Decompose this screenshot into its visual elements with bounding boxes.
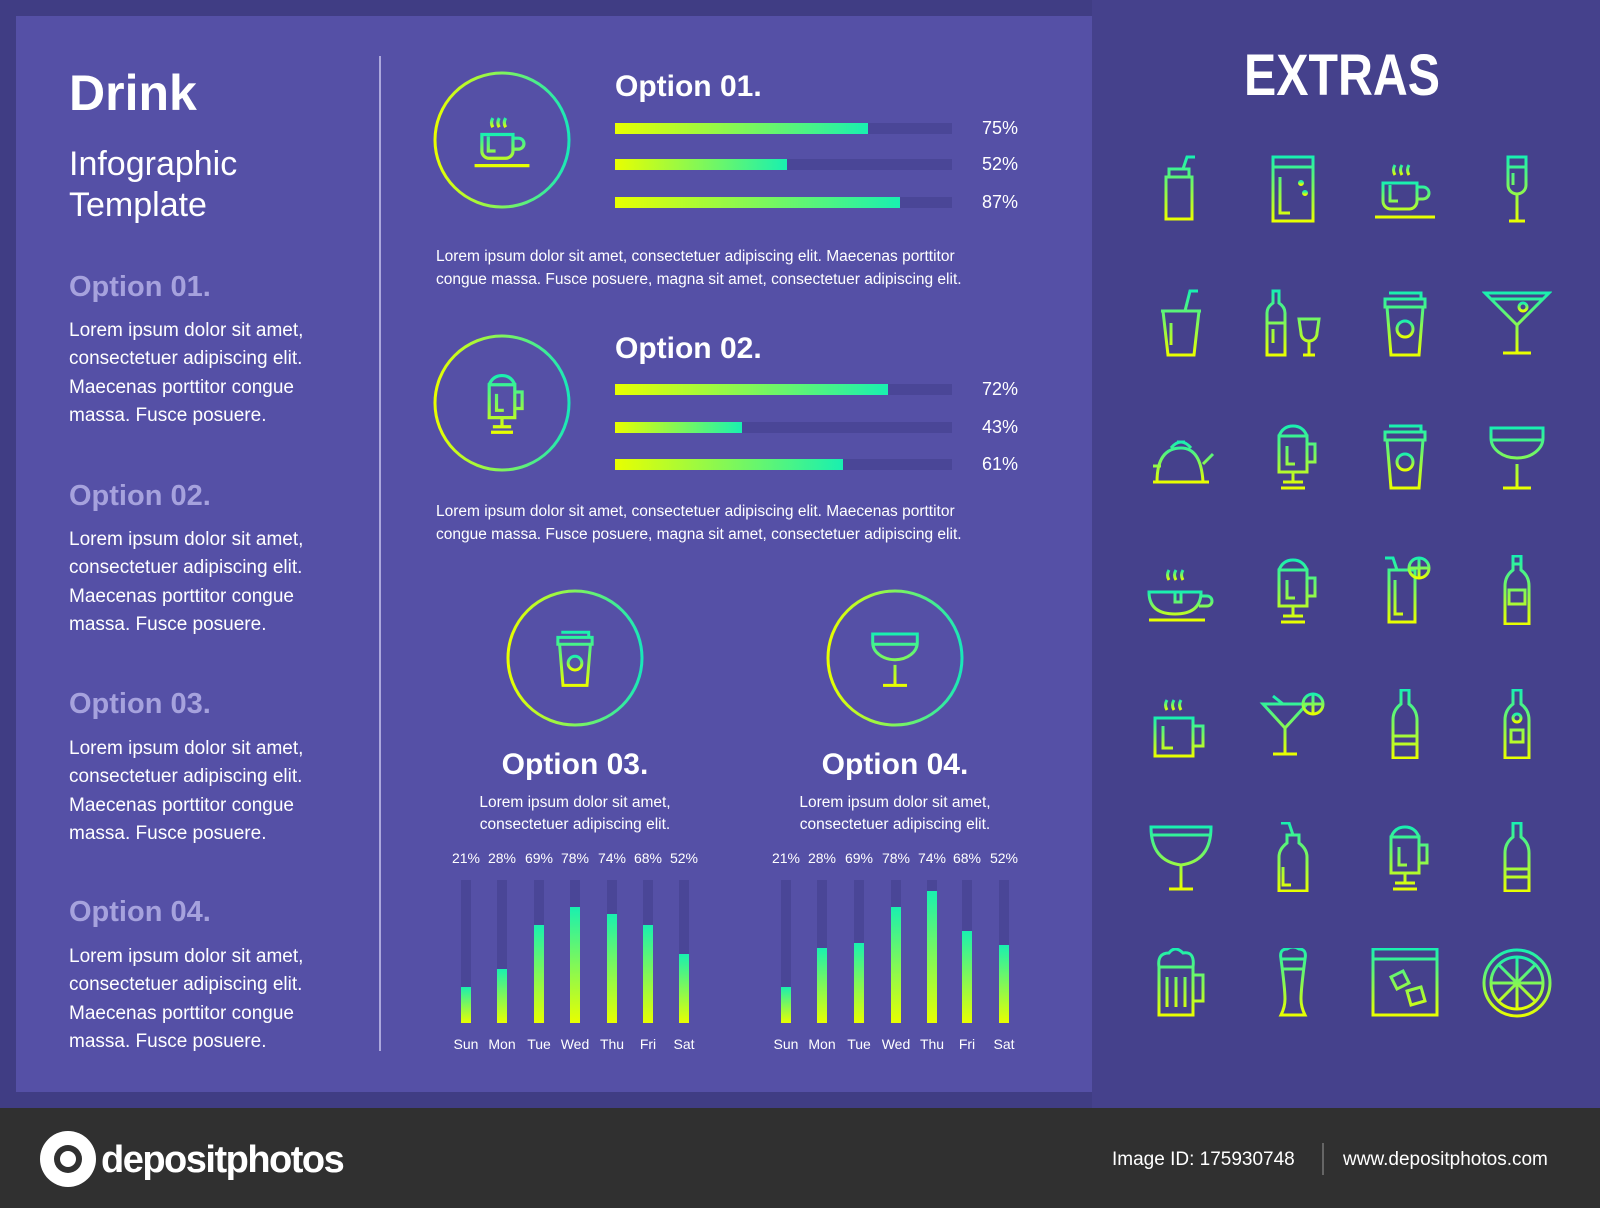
panel: option 02: Option 02. bbox=[615, 332, 762, 365]
left column: title: Infographic bbox=[69, 145, 237, 183]
left option 04: Maecenas porttitor congue bbox=[69, 1003, 294, 1024]
main panel bbox=[16, 16, 1092, 1092]
bar chart: Wed bbox=[882, 1036, 910, 1052]
panel: option 03: Option 03. bbox=[502, 748, 648, 781]
left option 03: consectetuer adipiscing elit. bbox=[69, 766, 302, 787]
panel: option 03: consectetuer adipiscing elit. bbox=[480, 816, 670, 833]
bar chart: 69% bbox=[845, 850, 873, 866]
icon: wine glass circle bbox=[828, 591, 962, 725]
panel: option 04: Lorem ipsum dolor sit amet, bbox=[799, 794, 991, 811]
icon grid: extras bbox=[1149, 157, 1550, 1016]
left option 04: Option 04. bbox=[69, 896, 211, 928]
left option 02: massa. Fusce posuere. bbox=[69, 614, 266, 635]
footer: www.depositphotos.com bbox=[1342, 1149, 1548, 1170]
left option 02: Option 02. bbox=[69, 480, 211, 512]
bar chart: Tue bbox=[527, 1036, 551, 1052]
bar chart: Sun bbox=[774, 1036, 798, 1052]
left column: title: Drink bbox=[69, 65, 197, 121]
left option 02: Maecenas porttitor congue bbox=[69, 586, 294, 607]
bar chart bbox=[772, 850, 1018, 1052]
left option 01: consectetuer adipiscing elit. bbox=[69, 348, 302, 369]
left option 01: massa. Fusce posuere. bbox=[69, 405, 266, 426]
left option 02 bbox=[69, 480, 303, 635]
icon: coffee cup circle bbox=[435, 73, 569, 207]
bars: 61% bbox=[982, 454, 1018, 474]
bar chart: 74% bbox=[598, 850, 626, 866]
footer bbox=[0, 1108, 1600, 1208]
bar chart: 74% bbox=[918, 850, 946, 866]
icon: logo camera bbox=[40, 1131, 96, 1187]
heading: extras: EXTRAS bbox=[1244, 43, 1440, 108]
bar chart: 68% bbox=[634, 850, 662, 866]
bar chart: 78% bbox=[561, 850, 589, 866]
panel: option 01: Option 01. bbox=[615, 70, 762, 103]
bar chart: Thu bbox=[920, 1036, 944, 1052]
icon: irish coffee circle bbox=[435, 336, 569, 470]
left option 02: consectetuer adipiscing elit. bbox=[69, 557, 302, 578]
panel: option 04: consectetuer adipiscing elit. bbox=[800, 816, 990, 833]
left option 03: Option 03. bbox=[69, 688, 211, 720]
left option 01: Lorem ipsum dolor sit amet, bbox=[69, 320, 303, 341]
left option 01: Maecenas porttitor congue bbox=[69, 377, 294, 398]
left option 04 bbox=[69, 896, 303, 1052]
bar chart: Wed bbox=[561, 1036, 589, 1052]
bar chart bbox=[452, 850, 698, 1052]
left option 04: Lorem ipsum dolor sit amet, bbox=[69, 946, 303, 967]
bar chart: 52% bbox=[990, 850, 1018, 866]
panel: option 01 bbox=[435, 70, 1018, 288]
bar chart: 28% bbox=[488, 850, 516, 866]
left column: title: Template bbox=[69, 186, 207, 224]
panel: option 02 bbox=[435, 332, 1018, 543]
left option 04: consectetuer adipiscing elit. bbox=[69, 974, 302, 995]
bar chart: Mon bbox=[488, 1036, 516, 1052]
left option 01 bbox=[69, 271, 303, 426]
icon: to-go cup circle bbox=[508, 591, 642, 725]
bar chart: Sun bbox=[454, 1036, 478, 1052]
panel: option 02: congue massa. Fusce posuere, magna sit amet, consectetuer adipiscing elit. bbox=[436, 526, 962, 543]
bar chart: Tue bbox=[847, 1036, 871, 1052]
footer: depositphotos bbox=[101, 1139, 344, 1181]
panel: option 03: Lorem ipsum dolor sit amet, bbox=[479, 794, 671, 811]
panel: option 03 bbox=[452, 591, 698, 1052]
bar chart: Fri bbox=[959, 1036, 975, 1052]
bar chart: 21% bbox=[452, 850, 480, 866]
bar chart: 78% bbox=[882, 850, 910, 866]
bars: 43% bbox=[982, 417, 1018, 437]
bar chart: Sat bbox=[993, 1036, 1015, 1052]
bar chart: Sat bbox=[673, 1036, 695, 1052]
left option 04: massa. Fusce posuere. bbox=[69, 1031, 266, 1052]
footer: Image ID: 175930748 bbox=[1112, 1149, 1295, 1170]
bar chart: 21% bbox=[772, 850, 800, 866]
bars bbox=[615, 118, 1018, 212]
bars: 52% bbox=[982, 154, 1018, 174]
panel: option 04 bbox=[772, 591, 1018, 1052]
left option 03: massa. Fusce posuere. bbox=[69, 823, 266, 844]
left column: title bbox=[69, 65, 237, 224]
bar chart: Thu bbox=[600, 1036, 624, 1052]
left option 03: Lorem ipsum dolor sit amet, bbox=[69, 738, 303, 759]
bar chart: 28% bbox=[808, 850, 836, 866]
bars bbox=[615, 379, 1018, 474]
bar chart: Fri bbox=[640, 1036, 656, 1052]
bars: 87% bbox=[982, 192, 1018, 212]
bars: 72% bbox=[982, 379, 1018, 399]
left option 02: Lorem ipsum dolor sit amet, bbox=[69, 529, 303, 550]
panel: option 01: congue massa. Fusce posuere, magna sit amet, consectetuer adipiscing elit. bbox=[436, 271, 962, 288]
left option 03: Maecenas porttitor congue bbox=[69, 795, 294, 816]
panel: option 01: Lorem ipsum dolor sit amet, consectetuer adipiscing elit. Maecenas porttitor bbox=[436, 248, 955, 265]
bar chart: 69% bbox=[525, 850, 553, 866]
panel: option 04: Option 04. bbox=[822, 748, 968, 781]
bar chart: 52% bbox=[670, 850, 698, 866]
bar chart: Mon bbox=[808, 1036, 836, 1052]
left option 03 bbox=[69, 688, 303, 844]
panel: option 02: Lorem ipsum dolor sit amet, consectetuer adipiscing elit. Maecenas porttitor bbox=[436, 503, 955, 520]
extras background bbox=[1092, 0, 1600, 1108]
left option 01: Option 01. bbox=[69, 271, 211, 303]
bars: 75% bbox=[982, 118, 1018, 138]
bar chart: 68% bbox=[953, 850, 981, 866]
